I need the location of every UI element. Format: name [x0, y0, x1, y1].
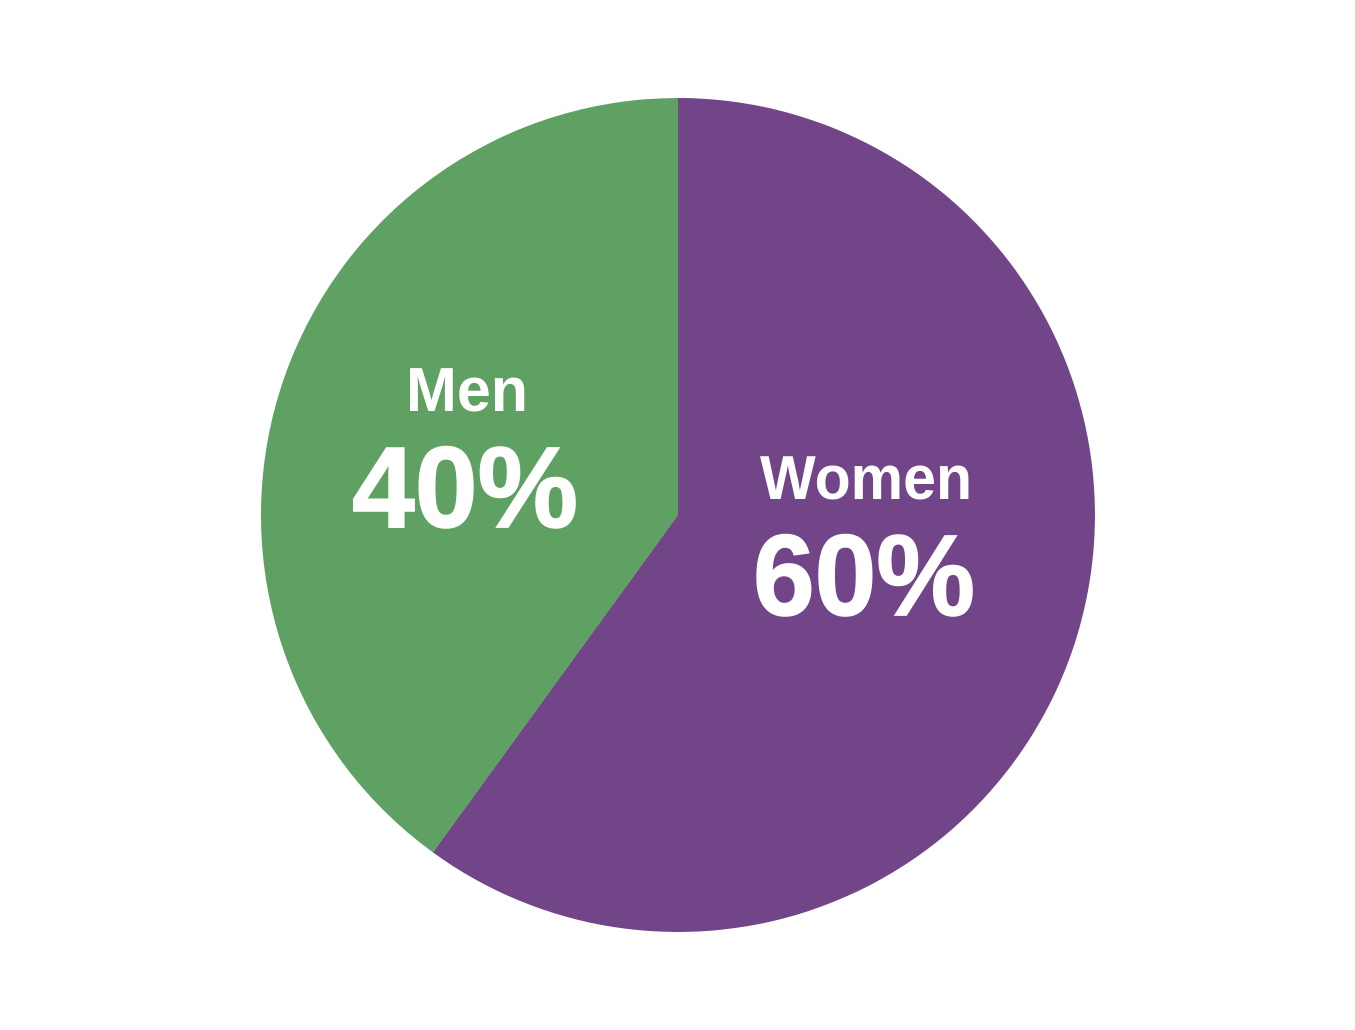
- label text: Men: Men: [406, 356, 528, 425]
- label: men 40%: [352, 356, 578, 552]
- value: 60%: 60%: [753, 512, 975, 640]
- label: women 60%: [753, 444, 975, 640]
- label text: Women: Women: [760, 444, 972, 513]
- pie slice: men 40%: [261, 98, 678, 852]
- value: 40%: 40%: [352, 424, 578, 552]
- pie slice: women 60%: [433, 98, 1095, 932]
